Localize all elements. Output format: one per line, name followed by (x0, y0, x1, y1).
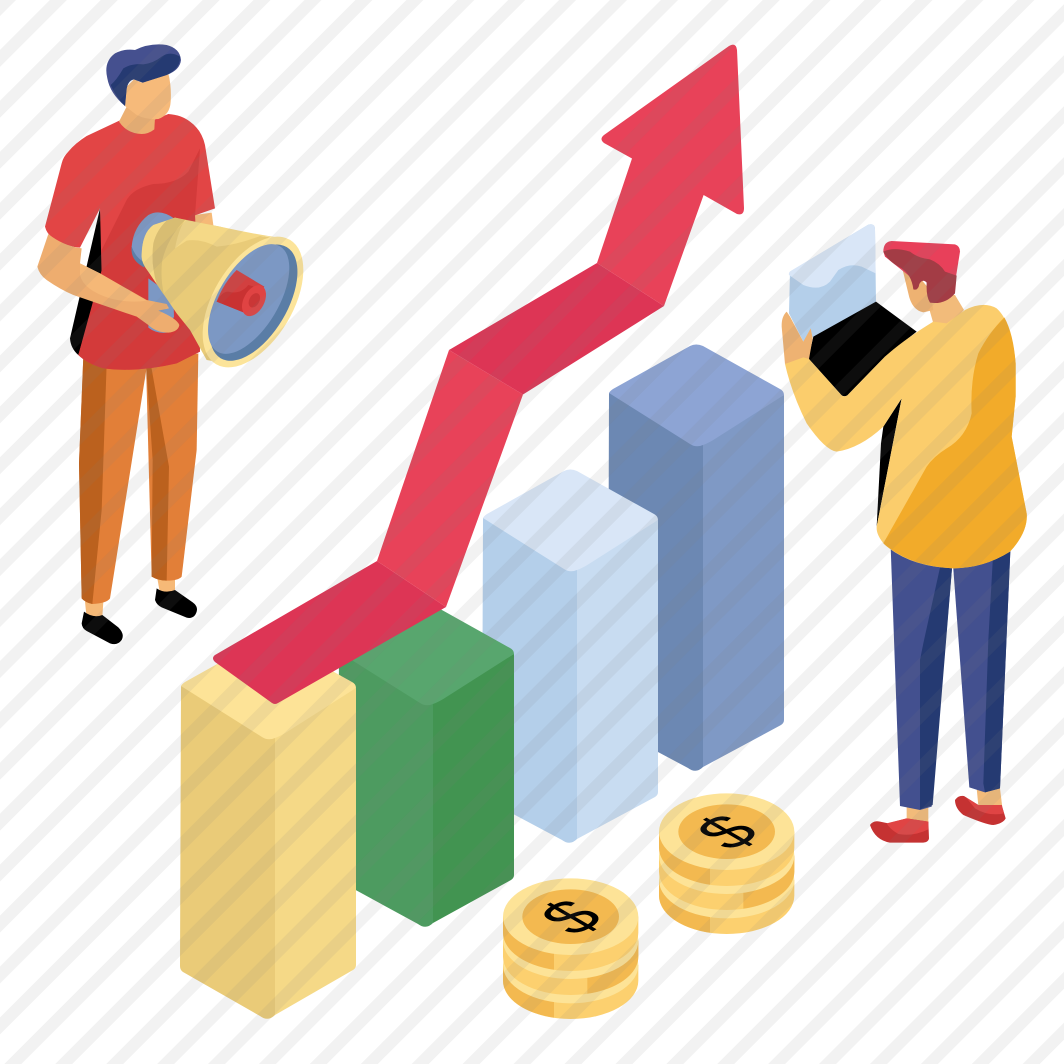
hand (782, 312, 813, 364)
upper body (37, 44, 324, 384)
handle and back cap (131, 230, 167, 267)
upper body (782, 224, 1027, 568)
shirt back shadow (70, 208, 107, 355)
bar: light blue (482, 470, 658, 843)
coin stack: upper right: $ (680, 805, 775, 859)
megaphone (131, 212, 324, 384)
hair (106, 44, 181, 106)
laptop (789, 224, 917, 396)
bar: yellow (180, 638, 356, 1019)
neck (119, 107, 155, 134)
trousers and shoes (79, 353, 198, 644)
coin stack: upper right (659, 793, 794, 934)
person: man with laptop (782, 224, 1027, 843)
trousers and shoes (870, 543, 1011, 843)
shirt back shadow (877, 398, 902, 527)
person: man with megaphone (37, 44, 324, 644)
arm and hand (37, 234, 179, 333)
sweater (785, 305, 1027, 568)
speaker (217, 270, 264, 315)
bar: green (338, 604, 514, 927)
face (903, 270, 933, 312)
t-shirt (45, 114, 215, 370)
rising arrow (213, 45, 744, 704)
cone (142, 218, 283, 363)
rim and opening (182, 220, 324, 384)
face (125, 73, 171, 119)
coin stack: lower left (503, 878, 638, 1019)
neck (927, 293, 964, 325)
bar: blue (608, 344, 784, 771)
hair (883, 241, 960, 277)
coin stack: lower left: $ (524, 890, 619, 944)
right sleeve skin (195, 213, 214, 230)
